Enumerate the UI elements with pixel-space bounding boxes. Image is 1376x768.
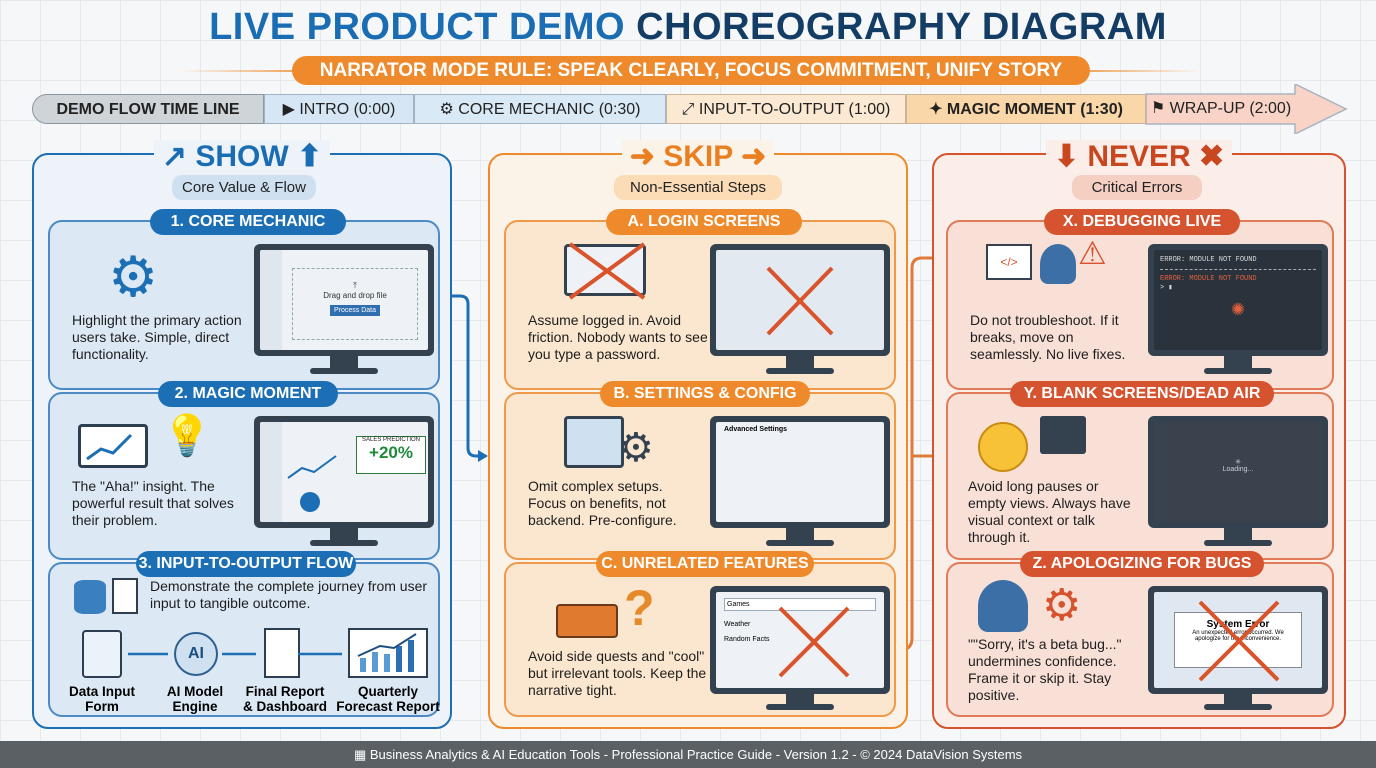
card: login: A. LOGIN SCREENS — [628, 213, 780, 230]
card: core mechanic — [48, 220, 440, 390]
flow steps: Quarterly Forecast Report — [336, 684, 440, 714]
card: core mechanic: Highlight the primary action users take. Simple, direct functionality. — [72, 312, 242, 362]
monitor: error terminal: ERROR: MODULE NOT FOUND ERROR: MODULE NOT FOUND — [1160, 256, 1257, 283]
card: magic moment: The "Aha!" insight. The powerful result that solves their problem. — [72, 478, 234, 528]
card: input to output: Demonstrate the complete journey from user input to tangible outcome. — [150, 578, 427, 611]
card: login: Assume logged in. Avoid friction. Nobody wants to see you type a password. — [528, 312, 708, 362]
card: blank screens: Avoid long pauses or empty views. Always have visual context or talk through it. — [968, 478, 1131, 545]
monitor: games: Games — [727, 601, 750, 608]
monitor: login — [710, 244, 890, 374]
card: magic moment: 💡 — [162, 414, 212, 458]
monitor: error terminal: ✺ — [1231, 297, 1245, 322]
footer: ▦ Business Analytics & AI Education Tools - Professional Practice Guide - Version 1.2 - © 2024 DataVision Systems — [354, 747, 1022, 762]
subtitle: Core Value & Flow — [182, 179, 306, 196]
timeline — [32, 84, 1348, 134]
monitor: system error: System Error — [1207, 619, 1269, 630]
card: magic moment — [48, 392, 440, 560]
title: LIVE PRODUCT DEMO CHOREOGRAPHY DIAGRAM — [209, 6, 1167, 48]
monitor: games: Random Facts — [724, 636, 770, 643]
heading: SHOW: ↗ SHOW ⬆ — [162, 140, 322, 173]
monitor: loading: ✳ — [1235, 459, 1241, 466]
subtitle — [1072, 175, 1202, 200]
flow steps — [69, 628, 440, 714]
monitor: advanced settings: Advanced Settings — [724, 426, 787, 433]
icon: crossed login — [564, 244, 646, 296]
subtitle — [614, 175, 782, 200]
card: unrelated: Avoid side quests and "cool" but irrelevant tools. Keep the narrative tight. — [528, 648, 706, 698]
icon: hand gear: ⚙ — [108, 245, 158, 308]
monitor: drag and drop: Drag and drop file — [323, 291, 387, 300]
card: settings — [504, 392, 896, 560]
icon: database to doc — [74, 580, 106, 614]
icon: laptop chart bulb — [78, 424, 148, 468]
subtitle — [172, 175, 316, 200]
card: debugging: X. DEBUGGING LIVE — [1063, 213, 1221, 230]
subtitle: Critical Errors — [1092, 179, 1182, 196]
icon: developer warning: </> — [1000, 255, 1018, 269]
icon: toolbox — [556, 604, 618, 638]
card: debugging — [946, 220, 1334, 390]
card: debugging: ⚠ — [1078, 235, 1107, 271]
subtitle: Non-Essential Steps — [630, 179, 766, 196]
card: magic moment: 2. MAGIC MOMENT — [175, 385, 321, 402]
monitor: system error: An unexpected error occurred. We apologize for the inconvenience. — [1192, 630, 1284, 642]
monitor: sales prediction: SALES PREDICTION — [362, 437, 420, 443]
panel: NEVER — [932, 153, 1346, 729]
heading: NEVER: ⬇ NEVER ✖ — [1054, 140, 1224, 173]
card: unrelated: ? — [624, 580, 655, 636]
card: input to output — [48, 562, 440, 717]
monitor: games — [710, 586, 890, 710]
monitor: loading — [1148, 416, 1328, 546]
flow steps: AI — [188, 645, 204, 662]
card: input to output: 3. INPUT-TO-OUTPUT FLOW — [139, 555, 353, 572]
card: apologizing: ⚙ — [1042, 581, 1081, 630]
monitor: loading: Loading... — [1223, 466, 1253, 473]
monitor: error terminal — [1148, 244, 1328, 374]
monitor: sales prediction — [254, 416, 434, 546]
monitor: drag and drop: ⤒ — [353, 281, 357, 290]
card: blank screens — [946, 392, 1334, 560]
icon: developer warning — [986, 244, 1032, 280]
card: unrelated: C. UNRELATED FEATURES — [601, 555, 809, 572]
timeline: ⚑ WRAP-UP (2:00) — [1151, 100, 1291, 117]
icon: yawning face — [978, 422, 1028, 472]
flow steps: Data Input Form — [69, 684, 135, 714]
monitor: sales prediction: +20% — [369, 443, 413, 462]
card: debugging: Do not troubleshoot. If it breaks, move on seamlessly. No live fixes. — [970, 312, 1125, 362]
icon: stressed person and bug gear — [978, 580, 1028, 632]
card: blank screens: Y. BLANK SCREENS/DEAD AIR — [1024, 385, 1260, 402]
flow steps: Final Report & Dashboard — [243, 684, 327, 714]
timeline: ⤢ INPUT-TO-OUTPUT (1:00) — [682, 101, 890, 118]
card: apologizing — [946, 562, 1334, 717]
monitor: games: Weather — [724, 621, 750, 628]
card: login — [504, 220, 896, 390]
timeline: ✦ MAGIC MOMENT (1:30) — [929, 101, 1123, 118]
monitor: drag and drop — [254, 244, 434, 374]
narrator banner: NARRATOR MODE RULE: SPEAK CLEARLY, FOCUS COMMITMENT, UNIFY STORY — [320, 60, 1062, 81]
panel: SKIP — [488, 153, 908, 729]
monitor: error terminal: > ▮ — [1160, 284, 1173, 292]
panel: SHOW — [32, 153, 452, 729]
footer — [0, 741, 1376, 768]
card: apologizing: ""Sorry, it's a beta bug..." undermines confidence. Frame it or skip it. Stay positive. — [968, 636, 1122, 703]
monitor: drag and drop: Process Data — [334, 307, 376, 314]
card: settings: ⚙ — [618, 426, 654, 470]
monitor: system error — [1148, 586, 1328, 710]
monitor: advanced settings — [710, 416, 890, 546]
card: settings: Omit complex setups. Focus on benefits, not backend. Pre-configure. — [528, 478, 677, 528]
flow steps: AI Model Engine — [167, 684, 223, 714]
icon: sliders gear — [564, 416, 624, 468]
timeline: DEMO FLOW TIME LINE — [56, 101, 240, 118]
timeline: ⚙ CORE MECHANIC (0:30) — [439, 101, 641, 118]
card: core mechanic: 1. CORE MECHANIC — [171, 213, 325, 230]
card: settings: B. SETTINGS & CONFIG — [613, 385, 797, 402]
timeline: ▶ INTRO (0:00) — [283, 101, 395, 118]
card: apologizing: Z. APOLOGIZING FOR BUGS — [1033, 555, 1251, 572]
heading: SKIP: ➜ SKIP ➜ — [630, 140, 766, 173]
card: unrelated — [504, 562, 896, 717]
